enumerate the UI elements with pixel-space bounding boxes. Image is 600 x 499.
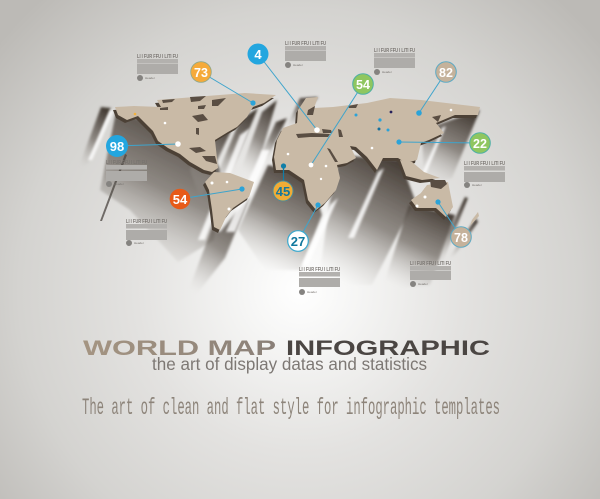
callout 45 xyxy=(273,163,293,201)
info block 8: LI I FUR FFU I LITI FU xyxy=(410,261,451,267)
callout 98 xyxy=(106,135,181,157)
title xyxy=(83,337,490,360)
info block 5: LI I FUR FFU I LITI FU xyxy=(464,161,505,167)
info block 4: LI I FUR FFU I LITI FU xyxy=(106,160,147,166)
map extrusion edge xyxy=(113,96,478,233)
small map dots xyxy=(134,109,452,210)
info block 2: LI I FUR FFU I LITI FU xyxy=(285,41,326,47)
Southeast Asia islands xyxy=(400,160,440,180)
info block 8: Header xyxy=(418,282,428,286)
info block 4 xyxy=(106,160,147,187)
callout 22 xyxy=(396,133,490,153)
Australia dark top xyxy=(430,180,447,189)
callout 78: 78 xyxy=(454,231,468,245)
info block 2: Header xyxy=(293,63,303,67)
callout 73 xyxy=(191,62,256,106)
info block 7: LI I FUR FFU I LITI FU xyxy=(299,267,340,273)
callout 54 orange: 54 xyxy=(173,192,188,207)
info block 1: LI I FUR FFU I LITI FU xyxy=(137,54,178,60)
info block 3: Header xyxy=(382,70,392,74)
continent: North America xyxy=(115,93,276,172)
info block 4: Header xyxy=(114,182,124,186)
callout 54 orange xyxy=(170,186,245,209)
info blocks xyxy=(106,41,505,295)
info block 1: Header xyxy=(145,76,155,80)
callout 54 green xyxy=(309,74,373,167)
callout 22: 22 xyxy=(473,137,487,151)
title: WORLD MAP xyxy=(83,337,276,360)
callout 73: 73 xyxy=(194,66,208,80)
North America water xyxy=(160,96,226,164)
info block 7: Header xyxy=(307,290,317,294)
info block 5: Header xyxy=(472,183,482,187)
callout 27: 27 xyxy=(291,234,305,249)
info block 5 xyxy=(464,161,505,188)
callout 54 green: 54 xyxy=(356,78,370,92)
info block 3: LI I FUR FFU I LITI FU xyxy=(374,48,415,54)
map shadows xyxy=(77,97,480,300)
title: INFOGRAPHIC xyxy=(286,337,490,360)
continent: South America xyxy=(205,172,254,230)
world map xyxy=(113,93,480,233)
info block 3 xyxy=(374,48,415,75)
callout 82 xyxy=(416,62,456,116)
info block 8 xyxy=(410,261,451,287)
continent: Australia xyxy=(411,182,453,217)
callout 4 xyxy=(248,44,320,133)
info block 6 xyxy=(126,219,167,246)
callout 45: 45 xyxy=(276,184,290,199)
callout 27 xyxy=(288,202,321,251)
continent: Eurasia and Africa xyxy=(274,97,480,210)
info block 1 xyxy=(137,54,178,81)
callout 98: 98 xyxy=(110,139,124,154)
info block 7 xyxy=(299,267,340,295)
white streaks xyxy=(88,110,446,265)
info block 6: LI I FUR FFU I LITI FU xyxy=(126,219,167,225)
callout 4: 4 xyxy=(254,47,262,62)
info block 6: Header xyxy=(134,241,144,245)
Eurasia water xyxy=(296,104,441,162)
callout 78 xyxy=(435,199,471,247)
info block 2 xyxy=(285,41,326,68)
subtitle: the art of display datas and statistics xyxy=(152,354,427,374)
New Zealand xyxy=(470,212,479,226)
callout 82: 82 xyxy=(439,66,453,80)
